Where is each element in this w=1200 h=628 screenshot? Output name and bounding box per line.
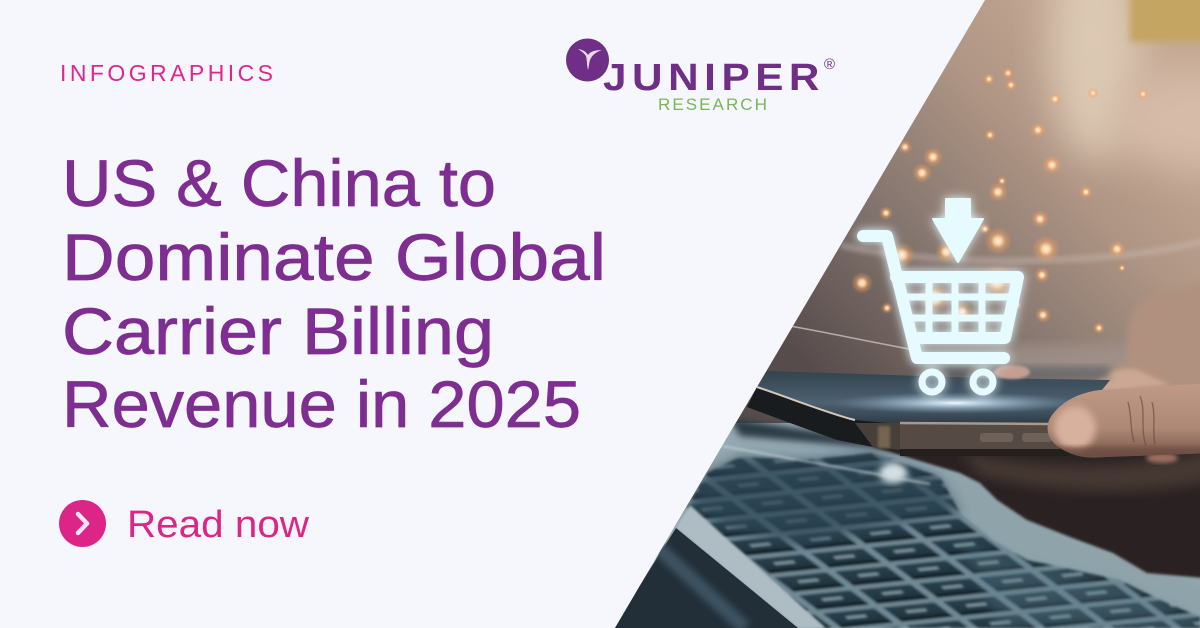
call to action: read now [59, 500, 310, 547]
icon: shopping cart [863, 236, 1018, 392]
title [62, 146, 606, 441]
thumb [1040, 383, 1200, 461]
title: Dominate Global [62, 220, 606, 294]
logo: Juniper Research: ® [824, 56, 835, 73]
phone [747, 365, 1110, 456]
photo panel: hand holding phone over laptop [600, 0, 1200, 628]
call to action: read now: Read now [127, 504, 310, 546]
label: INFOGRAPHICS: INFOGRAPHICS [60, 60, 273, 86]
upper fingers, blurred [1110, 303, 1200, 388]
logo: Juniper Research [566, 38, 835, 114]
title: US & China to [62, 146, 496, 220]
background sparkles [851, 67, 1149, 334]
icon: download arrow [933, 199, 983, 262]
title: Carrier Billing [62, 294, 494, 368]
dark palm and lower hand [873, 440, 1200, 579]
laptop and keyboard [600, 418, 1200, 628]
logo: Juniper Research: RESEARCH [658, 95, 769, 114]
title: Revenue in 2025 [62, 367, 581, 441]
logo: Juniper Research: JUNIPER [603, 57, 825, 99]
